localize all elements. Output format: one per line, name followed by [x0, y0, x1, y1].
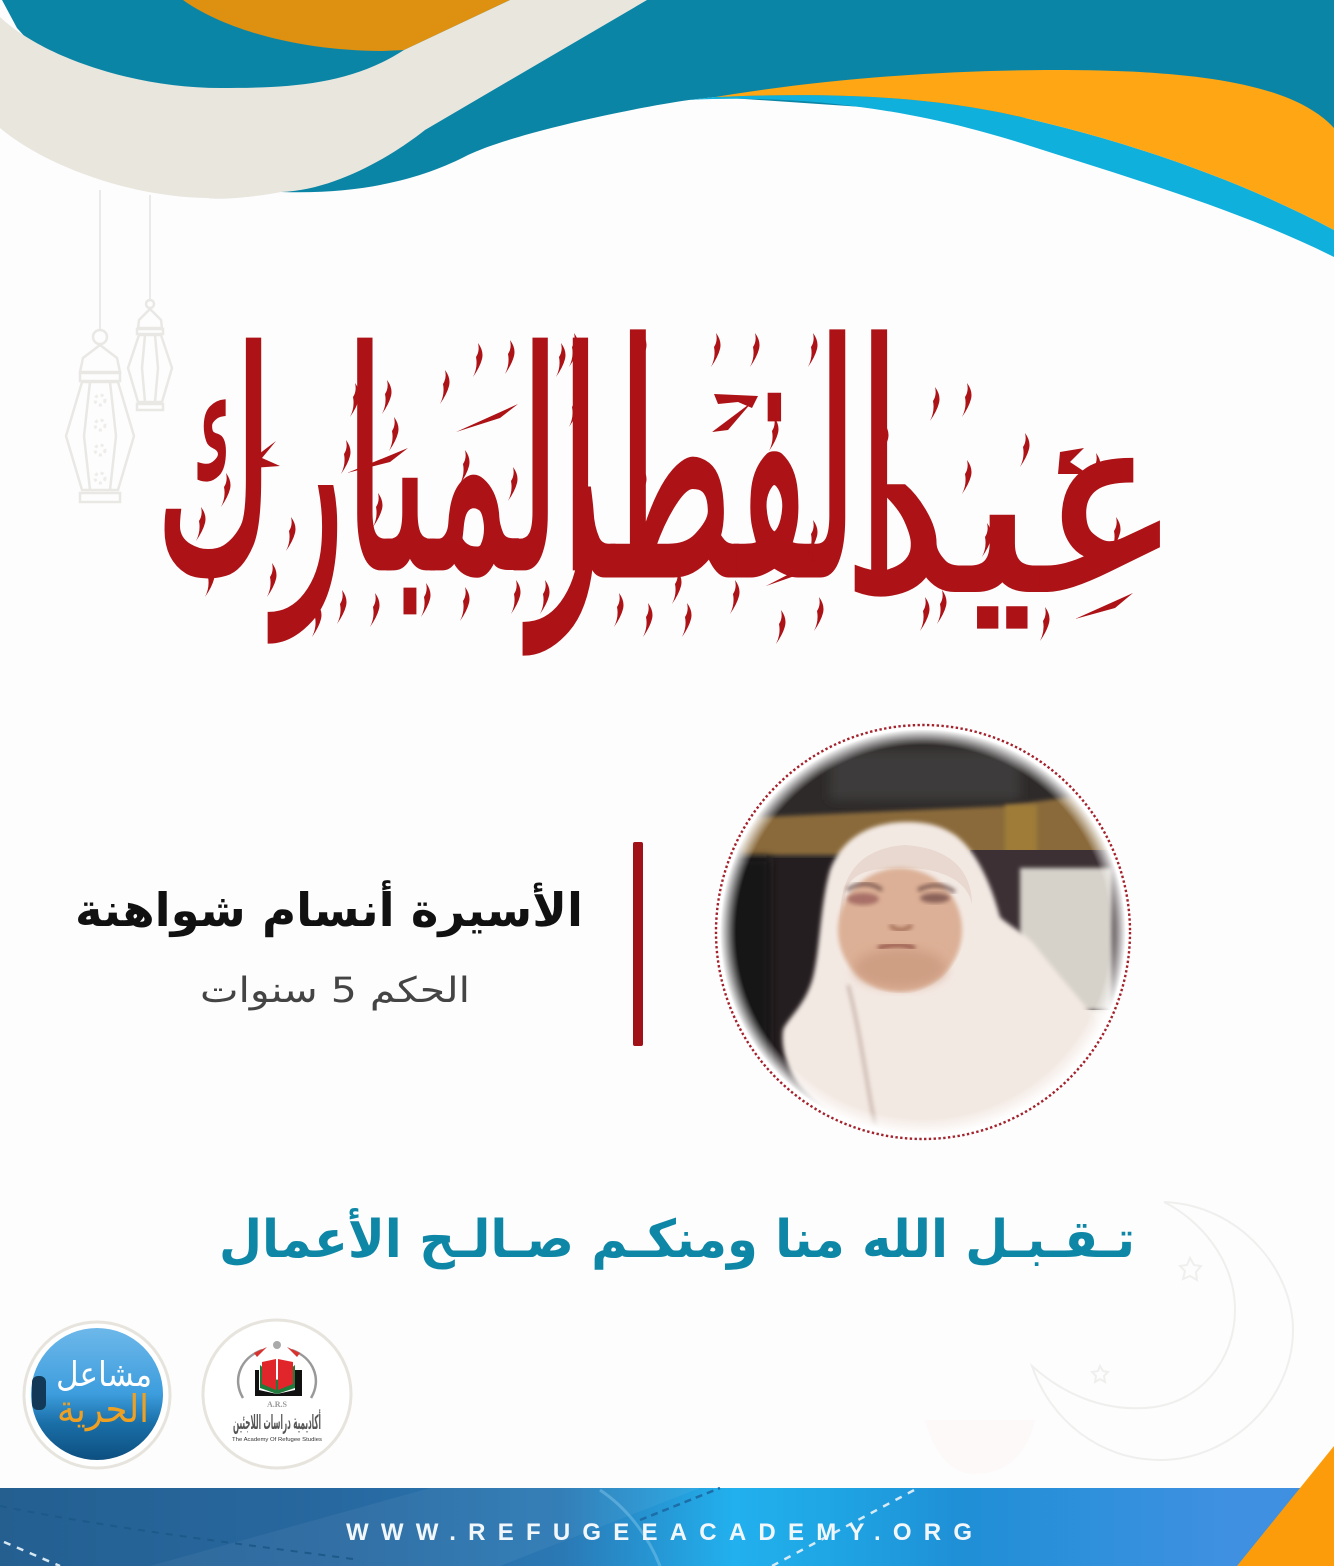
- prisoner name: الأسيرة أنسام شواهنة: [75, 880, 583, 937]
- sentence text: الحكم 5 سنوات: [200, 971, 470, 1011]
- top decorative waves: [0, 0, 1334, 257]
- icon: hanging lanterns: [66, 190, 172, 502]
- logo wordmark: orange: الحرية: [57, 1387, 149, 1432]
- title: Eid al-Fitr calligraphy: [156, 278, 1182, 653]
- logo: Academy of Refugee Studies: [203, 1320, 351, 1468]
- footer website: WWW.REFUGEEACADEMY.ORG: [346, 1519, 972, 1546]
- footer band: [0, 1488, 1334, 1566]
- portrait: photo of the prisoner: [720, 730, 1126, 1130]
- ornamental calligraphy marks: [196, 333, 1133, 644]
- word: al-fitr: الفطر: [524, 278, 900, 653]
- text: أكاديمية دراسات اللاجئين: [233, 1408, 321, 1434]
- footer orange corner: [1237, 1446, 1334, 1566]
- word: eid: عيد: [842, 358, 1182, 649]
- divider bar: [633, 842, 643, 1046]
- logo: Academy of Refugee Studies: The Academy Of Refugee Studies: [232, 1437, 322, 1443]
- logo: Mashael Al-Hurriya: [24, 1322, 170, 1468]
- icon: crescent moon with stars: [1032, 1202, 1293, 1460]
- logo: Academy of Refugee Studies: A.R.S: [267, 1400, 288, 1409]
- logo wordmark: white: مشاعل: [56, 1355, 152, 1395]
- closing greeting: تـقـبـل الله منا ومنكـم صـالـح الأعمال: [219, 1207, 1135, 1270]
- word: al-mubarak: المبارك: [156, 289, 600, 642]
- portrait: dotted ring: [716, 725, 1130, 1139]
